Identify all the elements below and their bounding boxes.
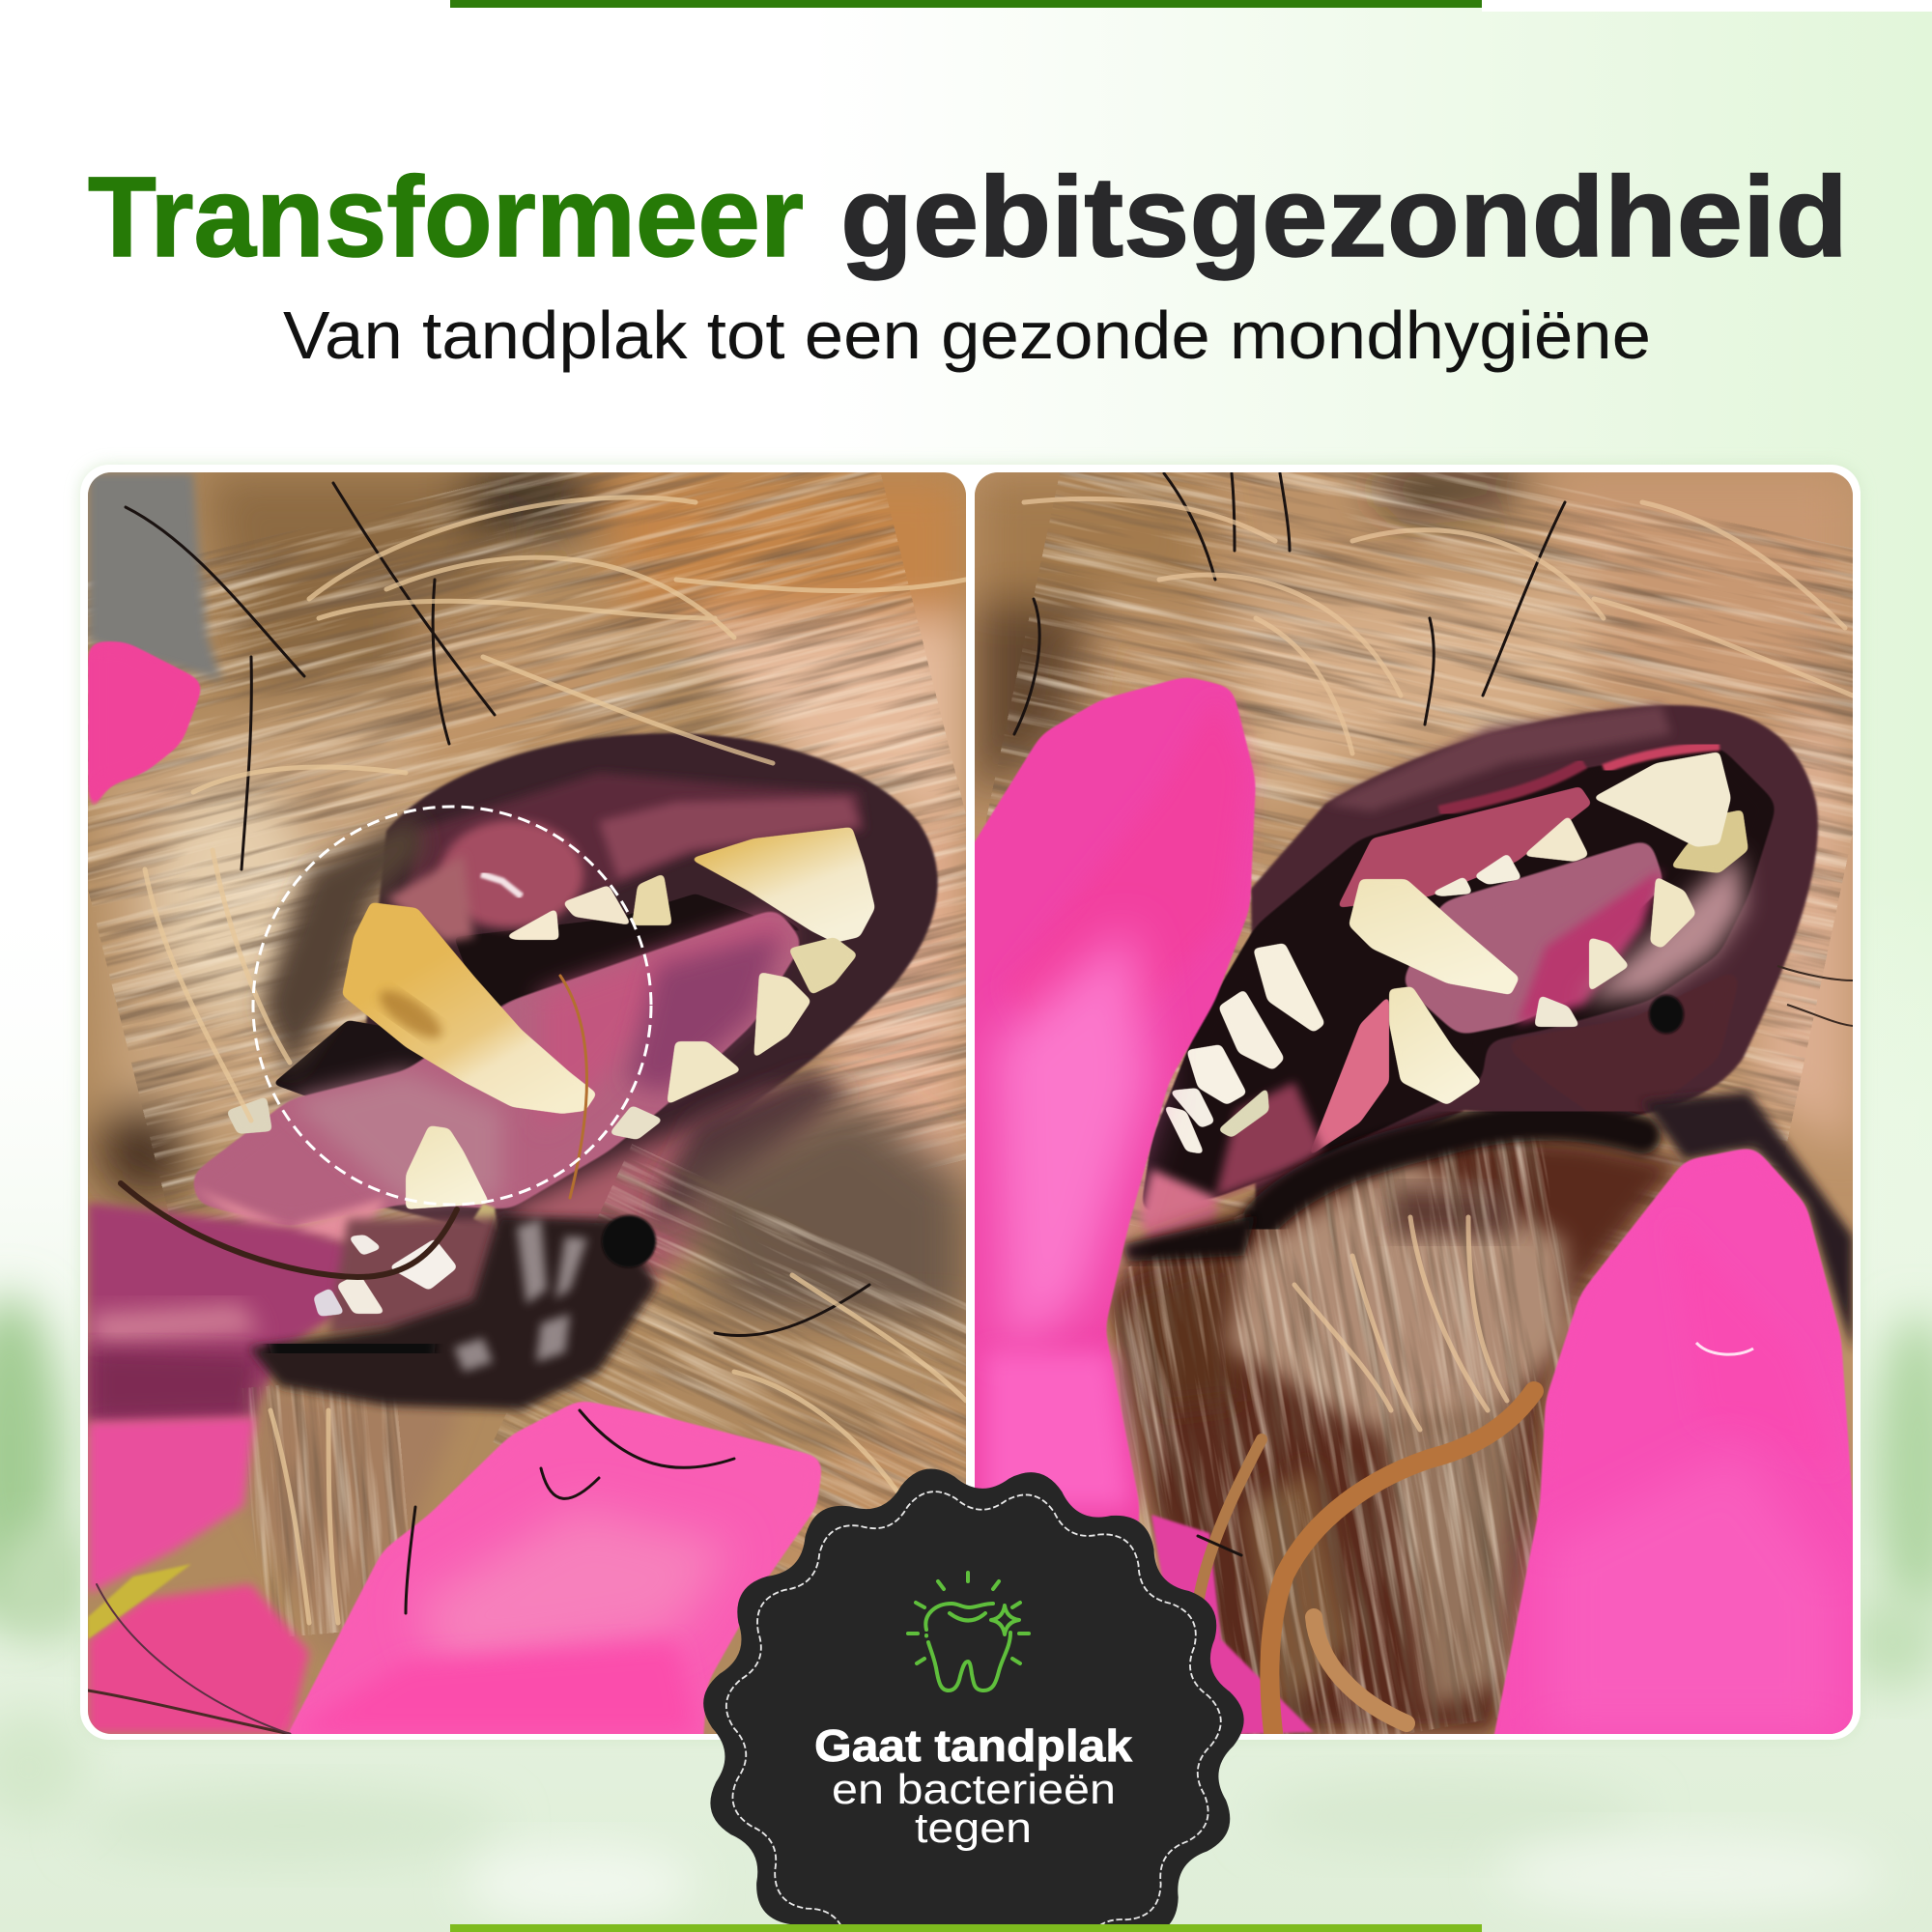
fur texture below lip (241, 1376, 416, 1638)
dashed highlight circle (253, 807, 651, 1205)
grey background wall (88, 472, 222, 681)
teeth (226, 827, 875, 1233)
fur texture lower right (494, 1144, 1052, 1638)
fur texture top (910, 384, 1911, 1354)
subtitle: Van tandplak tot een gezonde mondhygiëne (283, 298, 1651, 373)
tongue (191, 908, 804, 1227)
gum (440, 820, 583, 928)
upper gum (1337, 786, 1592, 908)
curled dark hair (121, 1183, 457, 1277)
scalloped shape (688, 1448, 1258, 1932)
fur masses (975, 472, 1853, 1150)
panel: after photo, clean teeth (910, 384, 1911, 1776)
lower lip and tongue underside (88, 1203, 357, 1422)
icon: stained back tooth (690, 827, 875, 943)
stain spot (373, 982, 448, 1046)
thin hair across (1777, 966, 1853, 1026)
fur strands (1014, 473, 1853, 1732)
inner cheek (1580, 850, 1745, 1001)
yellow strip (88, 1564, 191, 1639)
dashed inner line (712, 1473, 1235, 1932)
small glove upper left (88, 640, 201, 806)
icon: stained upper canine (342, 902, 597, 1114)
lower pink glove bit (1151, 1515, 1314, 1734)
lower right lip (1499, 966, 1743, 1122)
white photo frame (80, 465, 1861, 1740)
badge text: tegen (915, 1804, 1032, 1852)
far right dark fur (1642, 1092, 1853, 1352)
right glove (1488, 1147, 1884, 1768)
lip outline and mouth (348, 733, 938, 1236)
badge: dark scalloped seal (688, 1448, 1258, 1932)
light fur fan (1227, 1159, 1569, 1430)
icon: lower canine (406, 1125, 490, 1209)
icon: lower canine (1389, 986, 1482, 1105)
bottom green bar (450, 1924, 1482, 1932)
golden curl (1269, 1391, 1534, 1732)
wet highlights (454, 1219, 587, 1372)
panel: before photo, stained teeth (88, 472, 966, 1734)
fur texture top (88, 472, 966, 1221)
fur below lip and right (249, 1092, 966, 1734)
badge text (814, 1720, 1132, 1852)
badge text: Gaat tandplak (814, 1720, 1132, 1771)
dark fur area by canine (261, 816, 425, 1072)
dark skin spot (602, 1215, 656, 1267)
icon: clean back tooth (1670, 810, 1748, 873)
fur strands (88, 483, 966, 1734)
lip (1251, 705, 1818, 1217)
red lower gum (1308, 995, 1389, 1157)
fur and background masses (97, 472, 966, 1198)
badge text: en bacterieën (832, 1766, 1116, 1813)
dark glossy lower lip (249, 1215, 657, 1410)
lower incisors (313, 1235, 458, 1317)
left glove (952, 676, 1256, 1604)
title: Transformeer (88, 154, 804, 281)
small upper teeth (562, 885, 632, 925)
muzzle skin (498, 1080, 780, 1286)
dark gap (456, 895, 799, 1006)
fur texture lower (1065, 1122, 1640, 1776)
top green bar (450, 0, 1482, 8)
teeth (1163, 752, 1748, 1154)
big glove (270, 1400, 823, 1768)
small lower teeth (667, 1041, 742, 1105)
incisors (1253, 943, 1325, 1033)
dark brown fur base (1111, 1130, 1685, 1734)
mouth roof (406, 773, 865, 927)
icon: shining tooth (908, 1573, 1029, 1690)
tongue (1401, 838, 1665, 1036)
mouth interior (1140, 746, 1777, 1215)
title: gebitsgezondheid (840, 154, 1848, 281)
dark lower lip band (1262, 1122, 1642, 1219)
title (88, 154, 1848, 281)
icon: clean upper canine (1349, 879, 1520, 995)
lower-left glove (88, 1417, 255, 1594)
